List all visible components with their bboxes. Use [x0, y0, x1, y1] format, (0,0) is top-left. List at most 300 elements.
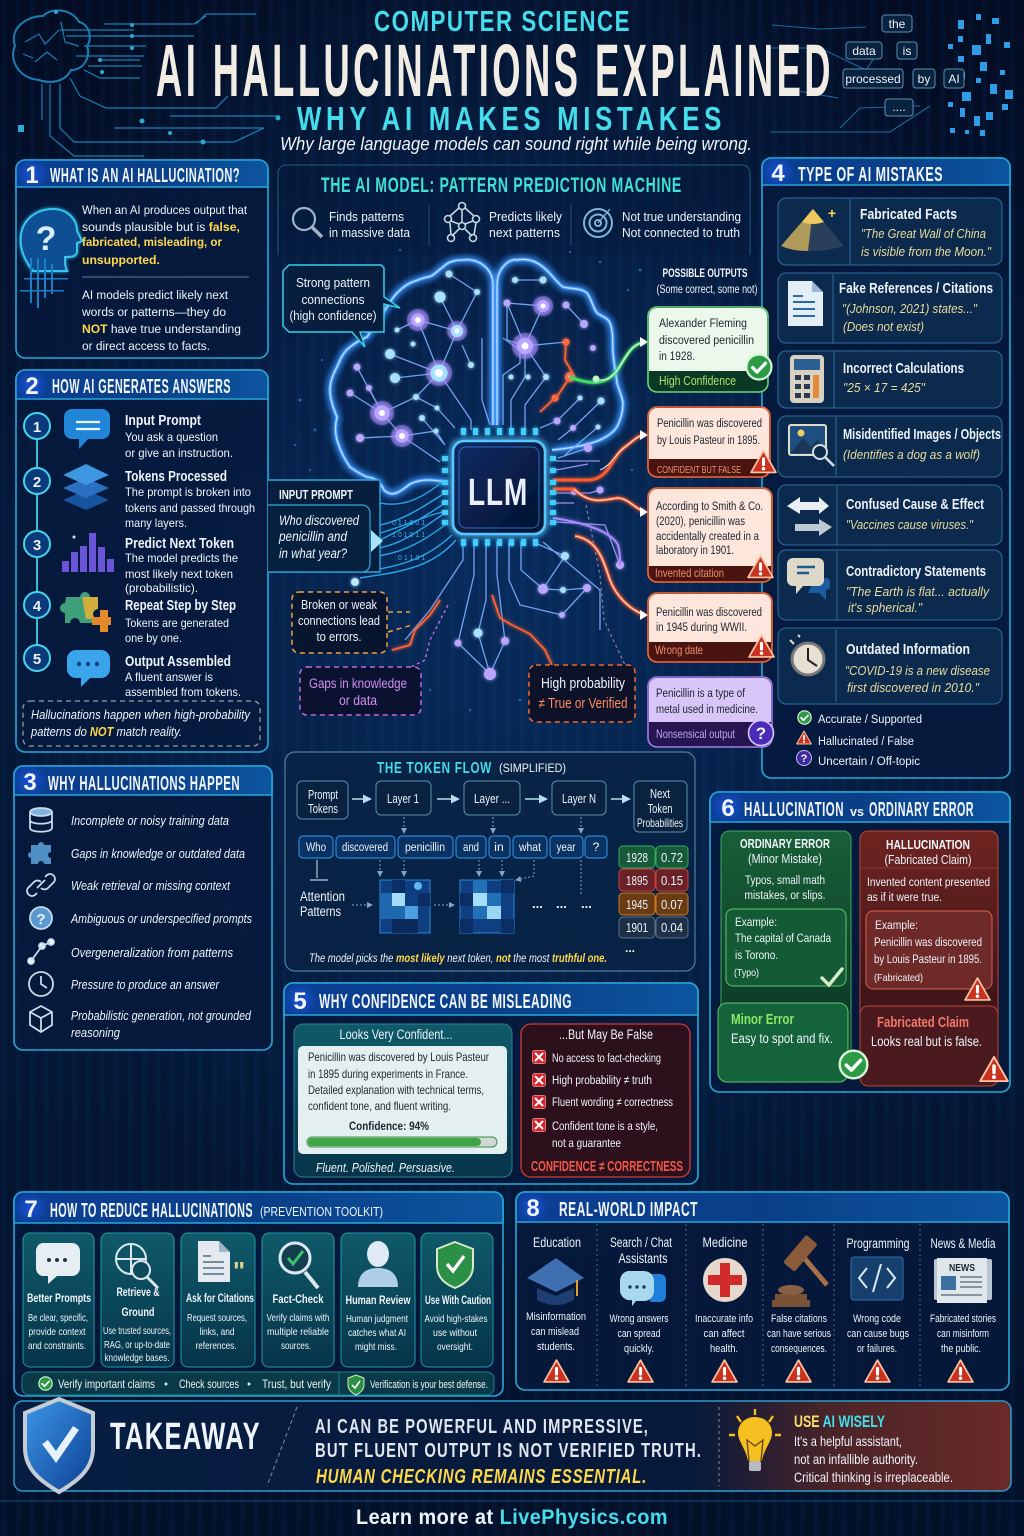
impact: news and media: News & Media: [930, 1236, 996, 1251]
input prompt panel: INPUT PROMPT: [279, 488, 353, 502]
mistake: incorrect calculations: "25 × 17 = 425": [843, 381, 925, 395]
panel 1: what is an AI hallucination: sounds plausible but is false,: [82, 220, 240, 234]
layer boxes: Token: [648, 801, 672, 816]
panel 6: hallucination vs ordinary error: [710, 790, 1010, 1092]
LLM brain diagram: [294, 249, 648, 711]
ordinary error column: mistakes, or slips.: [744, 888, 826, 902]
mistake: fake references: [778, 273, 1002, 343]
panel 6: hallucination vs ordinary error: vs: [850, 804, 864, 819]
tool: human review: Human Review: [346, 1293, 411, 1307]
token chips: the data is processed by AI: AI: [948, 72, 960, 86]
panel: the token flow: [285, 752, 695, 971]
reasons list: [70, 813, 252, 1040]
reasons list: Weak retrieval or missing context: [71, 878, 231, 893]
step 5 output assembled: assembled from tokens.: [125, 685, 241, 699]
tool: human review: might miss.: [355, 1341, 397, 1353]
token chips: and: [463, 840, 479, 854]
panel: the AI model pattern prediction machine: [278, 165, 750, 255]
output card: invented citation: Invented citation: [655, 566, 724, 580]
reasons list: Ambiguous or underspecified prompts: [70, 911, 252, 926]
ordinary error column: The capital of Canada: [735, 931, 831, 945]
left box looks very confident: Penicillin was discovered by Louis Pasteur: [308, 1050, 489, 1064]
layer boxes: [297, 781, 687, 832]
tool: better prompts: provide context: [28, 1326, 86, 1338]
panel 3: why hallucinations happen: [13, 764, 272, 1050]
note: hallucinations happen: patterns do NOT match reality.: [30, 725, 182, 739]
reasons list: Pressure to produce an answer: [71, 977, 220, 992]
panel 1: what is an AI hallucination: 1: [25, 162, 39, 189]
reminder strip: Verify important claims: [58, 1377, 155, 1391]
hallucination column: as if it were true.: [867, 890, 942, 904]
icon: lightbulb: [729, 1409, 781, 1471]
right box but may be false: Confident tone is a style,: [552, 1119, 658, 1133]
output card: invented citation: accidentally created in a: [656, 529, 759, 543]
tool: better prompts: Be clear, specific,: [28, 1312, 88, 1324]
icon: network: [444, 202, 480, 242]
left box looks very confident: confident tone, and fluent writing.: [308, 1099, 451, 1113]
callout: strong pattern connections: Strong pattern: [296, 275, 370, 290]
mistake: fabricated facts: Fabricated Facts: [860, 207, 957, 223]
panel: the token flow: Patterns: [300, 904, 341, 919]
impact: education: Education: [533, 1235, 581, 1250]
tool: ask for citations: ": [233, 1256, 245, 1286]
step 2 tokens processed: tokens and passed through: [125, 501, 255, 515]
hallucination column: (Fabricated): [874, 972, 923, 984]
panel: the AI model pattern prediction machine: next patterns: [489, 226, 560, 240]
output card: wrong date: Penicillin was discovered: [656, 605, 762, 619]
note: broken or weak connections: Broken or weak: [301, 597, 377, 612]
hallucination column: HALLUCINATION: [886, 837, 970, 852]
ordinary error column: [718, 831, 867, 1082]
mistake: confused cause and effect: "Vaccines cause viruses.": [846, 518, 973, 532]
mistake: fabricated facts: is visible from the Moon.": [861, 245, 991, 259]
hallucination column: by Louis Pasteur in 1895.: [874, 952, 982, 966]
ordinary error column: ORDINARY ERROR: [740, 836, 830, 851]
mistake: misidentified images: (Identifies a dog as a wolf): [843, 448, 980, 462]
token chips: the data is processed by AI: [843, 15, 964, 116]
tool: ask for citations: Ask for Citations: [186, 1291, 254, 1305]
token chips: what: [518, 840, 541, 854]
note: broken or weak connections: connections lead: [298, 613, 380, 628]
LLM brain diagram: 0 1 1 0 1: [398, 555, 425, 562]
possible outputs heading: (Some correct, some not): [656, 282, 758, 296]
panel: the AI model pattern prediction machine: in massive data: [329, 226, 410, 240]
mistake: fabricated facts: +: [828, 205, 836, 221]
layer boxes: Next: [650, 786, 670, 801]
impact: news and media: can misinform: [937, 1328, 989, 1340]
tool: better prompts: and constraints.: [28, 1340, 86, 1352]
data stream from input prompt to chip: [352, 482, 456, 585]
callout: strong pattern connections: connections: [302, 292, 365, 307]
panel: the token flow: ...: [532, 896, 543, 911]
mistake: outdated information: Outdated Information: [846, 642, 970, 658]
output card: invented citation: laboratory in 1901.: [656, 543, 734, 557]
step 1 input prompt: You ask a question: [125, 430, 218, 444]
layer boxes: Tokens: [308, 801, 338, 816]
panel 7: how to reduce hallucinations: [14, 1192, 503, 1396]
reasons list: Overgeneralization from patterns: [71, 945, 233, 960]
output card: invented citation: According to Smith & Co.: [656, 499, 763, 513]
left box looks very confident: Looks Very Confident...: [340, 1027, 452, 1042]
output card: wrong date: in 1945 during WWII.: [656, 620, 747, 634]
mistake: confused cause and effect: Confused Cause & Effect: [846, 497, 984, 513]
panel: the token flow: ...: [556, 896, 567, 911]
attention matrix 2: [460, 880, 514, 933]
panel 2: how AI generates answers: 2: [25, 373, 39, 400]
right box but may be false: No access to fact-checking: [552, 1051, 661, 1065]
mistake: incorrect calculations: [778, 351, 1002, 408]
impact: search chat assistants: Search / Chat: [610, 1235, 672, 1250]
impact: medicine: health.: [710, 1343, 738, 1355]
impact: law false citations: False citations: [771, 1313, 827, 1325]
minor error box: Minor Error: [731, 1012, 794, 1028]
icon: shield: [25, 1399, 93, 1492]
panel 8: real-world impact: REAL-WORLD IMPACT: [559, 1199, 698, 1221]
probability table: [619, 846, 688, 955]
mistake: outdated information: "COVID-19 is a new disease: [845, 664, 990, 678]
note: gaps in knowledge: Gaps in knowledge: [309, 676, 407, 691]
token chips: penicillin: [405, 840, 445, 854]
panel 3: why hallucinations happen: WHY HALLUCINATIONS HAPPEN: [48, 773, 240, 795]
step 1 input prompt: or give an instruction.: [125, 446, 233, 460]
fabricated claim box: [860, 1006, 1008, 1086]
token chips: [299, 836, 607, 858]
input prompt panel: penicillin and: [278, 529, 347, 544]
mistake: fake references: "(Johnson, 2021) states...": [842, 302, 977, 316]
left box looks very confident: Detailed explanation with technical terms,: [308, 1083, 484, 1097]
possible outputs heading: [656, 266, 758, 296]
panel 8: real-world impact: 8: [526, 1195, 540, 1222]
callout: strong pattern connections: [283, 265, 400, 347]
left box looks very confident: Fluent. Polished. Persuasive.: [316, 1160, 455, 1175]
panel: the token flow: Attention: [300, 889, 345, 904]
input prompt panel: [268, 480, 383, 572]
panel: the AI model pattern prediction machine: Not connected to truth: [622, 226, 740, 240]
tool: use with caution: Use With Caution: [425, 1293, 491, 1307]
panel 7: how to reduce hallucinations: (PREVENTION TOOLKIT): [260, 1204, 383, 1219]
tool: retrieve and ground: Retrieve &: [116, 1285, 160, 1299]
reason icons: [27, 808, 55, 1032]
legend: ?: [801, 753, 808, 765]
icon: head with question mark: ?: [36, 220, 56, 258]
panel 3: why hallucinations happen: ?: [36, 911, 46, 928]
tool: ask for citations: Request sources,: [187, 1312, 247, 1324]
note: broken or weak connections: [292, 592, 412, 653]
panel 7: how to reduce hallucinations: 7: [24, 1196, 38, 1223]
impact: programming: can cause bugs: [847, 1328, 909, 1340]
output card: high confidence: High Confidence: [659, 374, 736, 388]
token chips: the data is processed by AI: data: [852, 44, 876, 58]
output card: high confidence: Alexander Fleming: [659, 316, 747, 330]
token chips: the data is processed by AI: by: [918, 72, 930, 86]
tool: human review: [341, 1233, 415, 1367]
impact: programming: Programming: [846, 1236, 910, 1251]
impact: law false citations: consequences.: [771, 1343, 827, 1355]
tool: ask for citations: [181, 1233, 255, 1367]
panel: the AI model pattern prediction machine: Not true understanding: [622, 210, 741, 224]
tool: fact-check: Fact-Check: [272, 1292, 324, 1306]
token chips: the data is processed by AI: processed: [845, 72, 901, 86]
brain inner wiring: [350, 274, 620, 674]
panel 8: real-world impact: [516, 1191, 1009, 1390]
note: broken or weak connections: to errors.: [316, 629, 362, 644]
output card: nonsensical output: Nonsensical output: [656, 728, 736, 741]
attention matrix 1: [380, 880, 430, 933]
output card: nonsensical output: Penicillin is a type of: [656, 686, 745, 700]
panel 1: what is an AI hallucination: [15, 157, 268, 358]
note: high probability not true: [529, 665, 635, 722]
ambient dots around brain: [294, 249, 642, 711]
impact: education: can mislead: [531, 1326, 579, 1338]
panel 6: hallucination vs ordinary error: 6: [721, 795, 735, 822]
impact: programming: [846, 1236, 910, 1382]
impact: law false citations: can have serious: [767, 1328, 831, 1340]
takeaway banner: TAKEAWAY: [110, 1416, 261, 1458]
LLM chip: [442, 428, 556, 546]
left box looks very confident: in 1895 during experiments in France.: [308, 1067, 468, 1081]
impact: search chat assistants: can spread: [618, 1328, 660, 1340]
impact: law false citations: [767, 1235, 831, 1382]
hallucination column: Example:: [875, 918, 918, 932]
layer boxes: Layer N: [562, 791, 596, 806]
impact: search chat assistants: quickly.: [624, 1343, 654, 1355]
tool: ask for citations: references.: [196, 1340, 236, 1352]
panel 1: what is an AI hallucination: WHAT IS AN AI HALLUCINATION?: [50, 165, 240, 187]
mistake: contradictory statements: [778, 550, 1002, 620]
step 5 output assembled: [67, 650, 241, 699]
dotted connectors: [352, 817, 581, 905]
note: hallucinations happen: Hallucinations happen when high-probability: [31, 708, 251, 722]
confidence bar: [307, 1137, 497, 1147]
panel: the token flow: THE TOKEN FLOW: [377, 760, 492, 777]
fabricated claim box: Looks real but is false.: [871, 1034, 982, 1049]
panel: the token flow: ...: [581, 896, 592, 911]
step 5 output assembled: Output Assembled: [125, 653, 231, 670]
panel 5: why confidence can be misleading: 5: [293, 988, 307, 1015]
probability table: 1895: [626, 873, 648, 888]
step rail: [24, 413, 50, 671]
tool: human review: catches what AI: [348, 1327, 406, 1339]
right box but may be false: not a guarantee: [552, 1136, 621, 1150]
minor error box: Easy to spot and fix.: [731, 1031, 833, 1046]
output card: high confidence: in 1928.: [659, 349, 695, 363]
use AI wisely: It's a helpful assistant,: [794, 1433, 902, 1449]
tool: better prompts: Better Prompts: [27, 1291, 91, 1305]
output card: high confidence: [648, 307, 771, 392]
mistake: fake references: (Does not exist): [843, 320, 924, 334]
panel 1: what is an AI hallucination: AI models predict likely next: [82, 288, 229, 302]
output card: confident but false: by Louis Pasteur in 1895.: [657, 433, 760, 447]
tool: retrieve and ground: knowledge bases.: [104, 1352, 170, 1364]
probability table: ...: [625, 941, 635, 955]
panel 1: what is an AI hallucination: When an AI produces output that: [82, 203, 248, 217]
use AI wisely: USE AI WISELY: [794, 1412, 885, 1431]
step 4 repeat step by step: [60, 592, 236, 645]
impact: search chat assistants: Assistants: [618, 1251, 668, 1266]
panel 2: how AI generates answers: [15, 368, 268, 752]
panel 2: how AI generates answers: HOW AI GENERATES ANSWERS: [52, 376, 231, 398]
output card: wrong date: [648, 593, 774, 662]
input prompt panel: Who discovered: [279, 513, 359, 528]
hallucination column: (Fabricated Claim): [884, 852, 972, 867]
output card: confident but false: CONFIDENT BUT FALSE: [657, 464, 741, 476]
tool: retrieve and ground: RAG, or up-to-date: [104, 1339, 170, 1351]
weak red wiring to high probability note: [392, 342, 572, 665]
note: gaps in knowledge: or data: [339, 693, 377, 708]
impact: news and media: the public.: [941, 1343, 981, 1355]
tool: fact-check: [262, 1233, 334, 1367]
impact: news and media: Fabricated stories: [930, 1313, 996, 1325]
step 4 repeat step by step: Repeat Step by Step: [125, 597, 236, 614]
probability table: 0.07: [661, 897, 683, 912]
left box looks very confident: Confidence: 94%: [349, 1119, 429, 1133]
takeaway message: BUT FLUENT OUTPUT IS NOT VERIFIED TRUTH.: [315, 1440, 702, 1462]
token chips: Who: [306, 840, 326, 854]
token chips: the data is processed by AI: ....: [892, 100, 906, 114]
brain outline: [330, 259, 623, 494]
output card: wrong date: Wrong date: [655, 643, 703, 657]
right box but may be false: Fluent wording ≠ correctness: [552, 1095, 673, 1109]
takeaway message: AI CAN BE POWERFUL AND IMPRESSIVE,: [315, 1416, 649, 1438]
step 2 tokens processed: Tokens Processed: [125, 468, 227, 485]
token chips: year: [556, 840, 576, 854]
output card: invented citation: (2020), penicillin was: [656, 514, 745, 528]
panel 1: what is an AI hallucination: unsupported.: [82, 253, 160, 267]
panel 1: what is an AI hallucination: words or patterns—they do: [81, 305, 226, 319]
impact: education: [526, 1235, 586, 1382]
use AI wisely: not an infallible authority.: [794, 1451, 918, 1467]
mistake: incorrect calculations: Incorrect Calculations: [843, 361, 964, 377]
probability table: 1945: [626, 897, 648, 912]
icon: target: [584, 209, 612, 237]
impact: news and media: [930, 1236, 996, 1382]
impact: news and media: NEWS: [949, 1263, 975, 1274]
possible outputs heading: POSSIBLE OUTPUTS: [662, 266, 748, 280]
hallucination column: Penicillin was discovered: [874, 935, 982, 949]
panel 1: what is an AI hallucination: or direct access to facts.: [82, 339, 210, 353]
output card: confident but false: [648, 407, 776, 477]
layer boxes: Probabilities: [637, 816, 683, 830]
step rail: 2: [33, 474, 41, 491]
legend: [796, 711, 922, 768]
tool: fact-check: multiple reliable: [267, 1326, 329, 1338]
icon: head with question mark: [20, 209, 82, 308]
tool: ask for citations: links, and: [200, 1326, 235, 1338]
output connector arrows: [553, 342, 645, 615]
left box looks very confident: [294, 1024, 512, 1177]
layer boxes: Layer ...: [474, 791, 510, 806]
fabricated claim box: Fabricated Claim: [877, 1015, 969, 1031]
impact: medicine: [695, 1235, 753, 1382]
mistake: contradictory statements: "The Earth is flat... actually: [846, 585, 990, 599]
tool: use with caution: Avoid high-stakes: [424, 1313, 488, 1325]
footer: Learn more at LivePhysics.com: [356, 1506, 668, 1529]
impact: search chat assistants: Wrong answers: [610, 1313, 669, 1325]
panel 1: what is an AI hallucination: fabricated, misleading, or: [82, 235, 222, 249]
header circuit decoration left: brain icon: [13, 10, 280, 156]
caption: The model picks the most likely next token, not the most truthful one.: [309, 951, 607, 965]
step 5 output assembled: A fluent answer is: [125, 670, 213, 684]
title block: [156, 6, 834, 154]
tool: retrieve and ground: Use trusted sources,: [103, 1325, 171, 1337]
step 3 predict next token: [62, 533, 238, 595]
step 3 predict next token: Predict Next Token: [125, 535, 234, 552]
title block: Why large language models can sound right while being wrong.: [280, 133, 752, 154]
note: gaps in knowledge: [300, 667, 421, 715]
step 4 repeat step by step: one by one.: [125, 631, 182, 645]
panel 4: type of AI mistakes: 4: [771, 160, 785, 187]
impact: education: Misinformation: [526, 1311, 586, 1323]
panel: the AI model pattern prediction machine: THE AI MODEL: PATTERN PREDICTION MACHINE: [321, 174, 682, 197]
legend: Uncertain / Off-topic: [818, 754, 920, 768]
mistake: fabricated facts: [778, 198, 1002, 265]
output card: nonsensical output: ?: [756, 724, 766, 743]
probability table: 0.72: [661, 850, 683, 865]
hallucination column: Invented content presented: [867, 875, 990, 889]
output card: nonsensical output: [648, 677, 774, 747]
panel 1: what is an AI hallucination: NOT have true understanding: [82, 322, 241, 336]
impact: education: students.: [537, 1341, 575, 1353]
token chips: discovered: [342, 840, 388, 854]
impact: medicine: Inaccurate info: [695, 1313, 753, 1325]
step 1 input prompt: Input Prompt: [125, 412, 201, 429]
step rail: 5: [33, 651, 41, 668]
panel 5: why confidence can be misleading: WHY CONFIDENCE CAN BE MISLEADING: [319, 991, 572, 1013]
right box but may be false: High probability ≠ truth: [552, 1073, 652, 1087]
impact: search chat assistants: [610, 1235, 672, 1382]
ordinary error column: (Typo): [734, 967, 759, 979]
token chips: the data is processed by AI: is: [903, 44, 911, 58]
step 3 predict next token: (probabilistic).: [125, 581, 198, 595]
step 2 tokens processed: many layers.: [125, 516, 187, 530]
legend: Accurate / Supported: [818, 712, 922, 726]
LLM brain diagram: 0 1 1 0 0 1: [392, 520, 425, 527]
output card: invented citation: [648, 488, 773, 582]
ordinary error column: Example:: [735, 915, 777, 929]
title block: COMPUTER SCIENCE: [374, 6, 631, 38]
probability table: 1901: [626, 920, 648, 935]
tool: use with caution: [421, 1233, 493, 1367]
output card: confident but false: Penicillin was discovered: [657, 416, 762, 430]
flow arrows: [352, 798, 629, 800]
right box but may be false: CONFIDENCE ≠ CORRECTNESS: [531, 1159, 683, 1175]
legend: Hallucinated / False: [818, 734, 914, 748]
input prompt panel: in what year?: [279, 546, 347, 561]
probability table: 0.15: [661, 873, 683, 888]
panel: the AI model pattern prediction machine: Predicts likely: [489, 210, 563, 224]
mistake: outdated information: [778, 628, 1002, 704]
hallucination column: [860, 831, 1008, 1086]
reasons list: reasoning: [71, 1025, 121, 1040]
reminder strip: [22, 1372, 494, 1395]
title block: WHY AI MAKES MISTAKES: [297, 100, 726, 137]
reminder strip: Verification is your best defense.: [370, 1379, 488, 1391]
output card: nonsensical output: metal used in medicine.: [656, 702, 758, 716]
reasons list: Probabilistic generation, not grounded: [71, 1008, 252, 1023]
takeaway banner: [14, 1399, 1011, 1492]
LLM chip: LLM: [468, 472, 528, 514]
use AI wisely: [794, 1412, 953, 1485]
step 4 repeat step by step: Tokens are generated: [125, 616, 229, 630]
panel 4: type of AI mistakes: [761, 155, 1010, 778]
tool: human review: Human judgment: [346, 1313, 408, 1325]
takeaway message: [315, 1416, 702, 1488]
step rail: 1: [33, 419, 41, 436]
use AI wisely: Critical thinking is irreplaceable.: [794, 1469, 953, 1485]
note: hallucinations happen: [23, 701, 260, 746]
step 3 predict next token: The model predicts the: [125, 551, 238, 565]
header circuit decoration right: tokens and data blocks: [770, 14, 1013, 136]
